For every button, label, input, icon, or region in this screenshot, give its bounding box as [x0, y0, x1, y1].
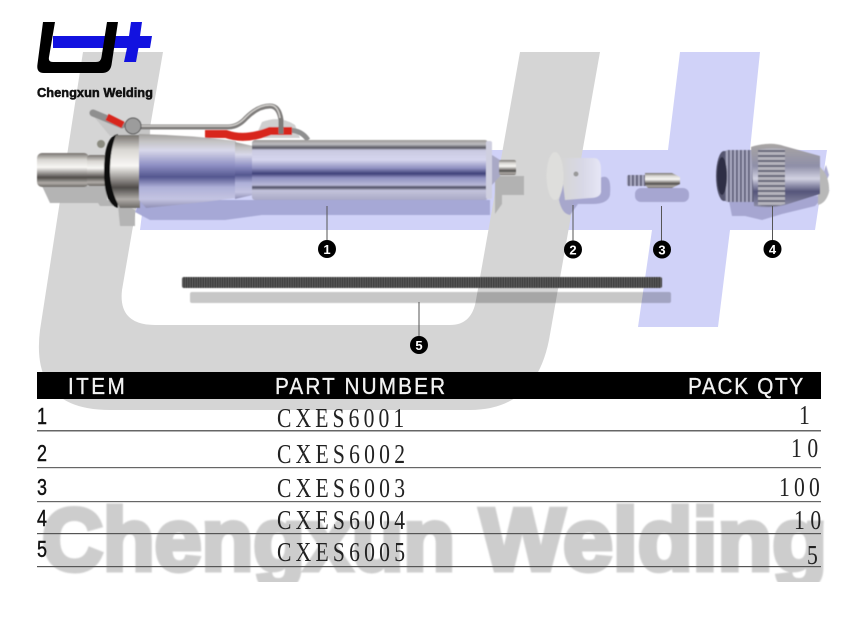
tip [37, 153, 89, 187]
torch shadow on lavender [135, 200, 490, 220]
red handle tube and ball [93, 113, 122, 125]
callout 1: 1 [323, 242, 331, 257]
table: row 2: CXES6002 [277, 440, 405, 470]
callout 4: 4 [769, 242, 777, 257]
table: row 4 [37, 506, 821, 536]
logo icon: black U [37, 22, 118, 73]
main tube [252, 140, 488, 200]
rear wires [284, 130, 308, 140]
callout 3: 3 [658, 242, 666, 258]
watermark: Chengxun Welding text: Welding [480, 490, 827, 589]
part 1: torch body [37, 105, 524, 226]
table: row 4: 10 [794, 506, 821, 536]
logo [37, 22, 153, 100]
part 5: threaded rod [182, 277, 671, 303]
table: row 2: 2 [37, 441, 47, 467]
black ring [104, 134, 118, 208]
watermark: Chengxun Welding text: Chengxun [42, 490, 455, 589]
end cap and pin [486, 141, 492, 199]
callout 2 [564, 205, 582, 258]
table: row 4: CXES6004 [277, 506, 405, 536]
logo text: Chengxun Welding [37, 86, 153, 100]
table: row 1: 1 [37, 404, 47, 430]
neck [87, 155, 107, 186]
table: row 2: 10 [791, 434, 818, 464]
watermark: Chengxun Welding text [42, 503, 824, 582]
collar [110, 135, 140, 208]
tapered front [139, 134, 236, 208]
watermark: large U shape [39, 52, 600, 410]
part 3: contact tip [627, 173, 689, 202]
table: row 5 [37, 537, 821, 571]
table header [37, 372, 821, 399]
callout 4 [764, 206, 782, 258]
table: row 1: CXES6001 [277, 404, 404, 434]
torch shadow on grey [42, 186, 135, 226]
table: row 3 [37, 473, 821, 504]
table: row 2 [37, 434, 821, 470]
part 4: nozzle [716, 144, 830, 220]
rod shadow [190, 292, 671, 303]
table: row 3: CXES6003 [277, 474, 405, 504]
clamp screw [125, 118, 141, 134]
table: row 4: 4 [37, 506, 47, 532]
rod [182, 277, 662, 288]
callout 2: 2 [569, 242, 577, 258]
table: row 1 [37, 401, 821, 434]
waist [235, 142, 253, 199]
table: row 3: 100 [779, 473, 820, 503]
table header: PART NUMBER [275, 373, 445, 399]
table header: ITEM [68, 373, 125, 399]
logo icon: blue plus [53, 22, 152, 62]
callout 3 [653, 206, 671, 258]
table: row 1: 1 [799, 401, 810, 431]
table: row 5: CXES6005 [277, 538, 405, 568]
callout 1 [318, 206, 336, 258]
part 2: ceramic shield [546, 152, 610, 215]
table: row 3: 3 [37, 475, 47, 501]
lever [140, 106, 281, 134]
table: row 5: 5 [807, 541, 818, 571]
watermark: large plus sign [140, 52, 827, 327]
callout 5 [410, 302, 428, 354]
table: row 5: 5 [37, 537, 47, 563]
table header: PACK QTY [688, 373, 804, 399]
callout 5: 5 [415, 338, 423, 353]
